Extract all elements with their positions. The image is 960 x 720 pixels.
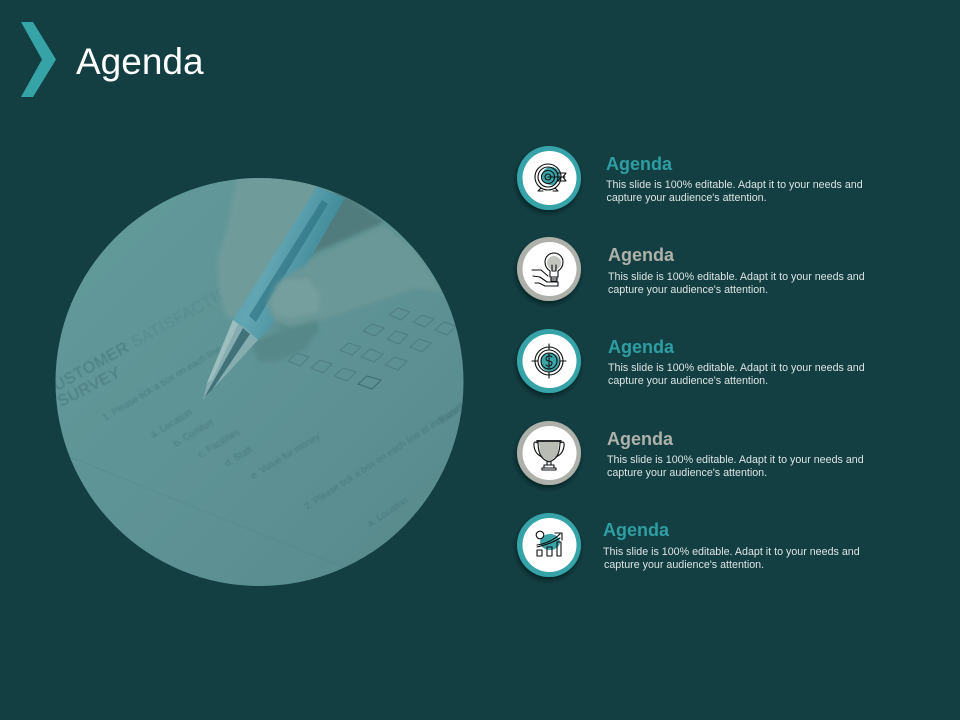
description: capture your audience's attention. bbox=[607, 467, 767, 479]
title: Agenda bbox=[76, 41, 204, 82]
description: This slide is 100% editable. Adapt it to your needs and bbox=[608, 271, 865, 283]
agenda item 5 bbox=[517, 513, 860, 577]
survey form text: a. Location bbox=[366, 495, 411, 530]
icon: target with arrow bbox=[517, 146, 581, 210]
survey form text: 2. Please tick a box on each line to indicate how much bbox=[303, 379, 500, 513]
heading: Agenda bbox=[608, 337, 675, 357]
survey form text bbox=[56, 292, 462, 526]
icon: light bulb in hand bbox=[517, 237, 581, 301]
icon: growth bar chart bbox=[517, 513, 581, 577]
survey form text: e. Value for money bbox=[249, 431, 323, 482]
icon: trophy bbox=[517, 421, 581, 485]
heading: Agenda bbox=[603, 520, 670, 540]
description: This slide is 100% editable. Adapt it to your needs and bbox=[606, 179, 863, 191]
description: capture your audience's attention. bbox=[608, 375, 768, 387]
survey form text: USTOMER SATISFACTION bbox=[51, 278, 243, 394]
survey form text: 1. Please tick a box on each line bbox=[101, 344, 223, 424]
survey form text: d. Staff bbox=[223, 445, 255, 470]
agenda item 3 bbox=[517, 329, 865, 393]
heading: Agenda bbox=[607, 429, 674, 449]
checkboxes bbox=[288, 308, 456, 389]
description: capture your audience's attention. bbox=[606, 192, 767, 204]
heading: Agenda bbox=[608, 245, 675, 265]
heading: Agenda bbox=[606, 154, 673, 174]
pen bbox=[203, 187, 345, 400]
survey form text: Excellent bbox=[437, 395, 476, 426]
agenda item 2 bbox=[517, 237, 865, 301]
agenda item 4 bbox=[517, 421, 864, 485]
survey form text: b. Comfort bbox=[172, 417, 216, 450]
thumb of hand bbox=[267, 225, 443, 335]
survey form text: c. Facilities bbox=[196, 427, 242, 461]
back fingers of hand bbox=[217, 176, 385, 362]
description: This slide is 100% editable. Adapt it to your needs and bbox=[607, 454, 864, 466]
survey form text: a. Location bbox=[149, 407, 194, 441]
description: capture your audience's attention. bbox=[604, 559, 764, 571]
icon: dollar crosshair bbox=[517, 329, 581, 393]
agenda item 1 bbox=[517, 146, 863, 210]
chevron icon bbox=[21, 22, 56, 97]
circular survey photo bbox=[56, 178, 464, 586]
description: This slide is 100% editable. Adapt it to your needs and bbox=[608, 362, 865, 374]
description: This slide is 100% editable. Adapt it to your needs and bbox=[603, 546, 860, 558]
survey form text: SURVEY bbox=[55, 364, 124, 411]
description: capture your audience's attention. bbox=[608, 284, 768, 296]
